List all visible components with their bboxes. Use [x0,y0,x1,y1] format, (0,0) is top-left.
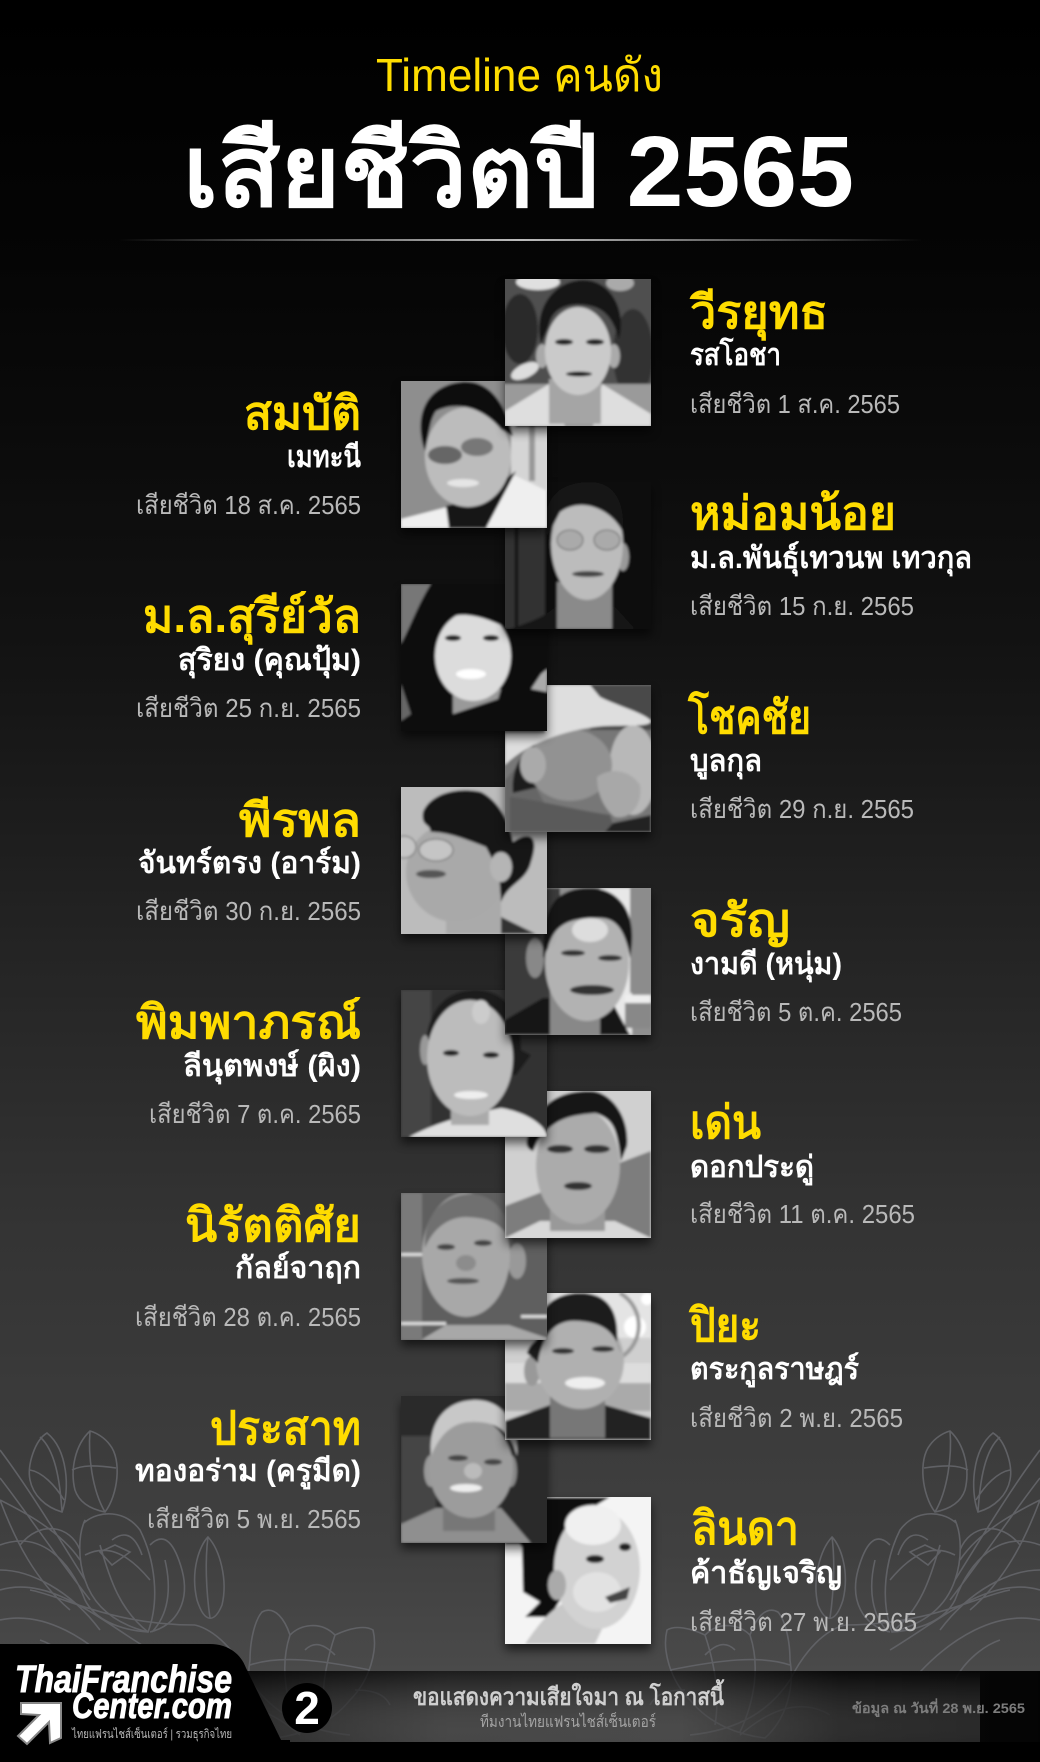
text: นิรัตติศัย กัลย์จาฤก: เสียชีวิต 28 ต.ค. 2565 [135,1302,361,1332]
photo: จรัญ [500,883,656,1041]
photo: นิรัตติศัย [396,1188,552,1346]
text: จรัญ งามดี [690,894,902,1027]
footer condolence message [413,1678,725,1731]
page number badge [282,1682,332,1734]
data date note: ข้อมูล ณ วันที่ 28 พ.ย. 2565 [852,1698,1025,1717]
text: ม.ล.สุรีย์วัล สุริยง [136,590,361,723]
text: จรัญ งามดี: งามดี (หนุ่ม) [690,948,842,983]
text: จรัญ งามดี: เสียชีวิต 5 ต.ค. 2565 [690,997,902,1027]
text: หม่อมน้อย: ม.ล.พันธุ์เทวนพ เทวกุล [690,541,972,577]
photo: เด่น [500,1086,656,1244]
photo: วีรยุทธ [500,274,656,432]
text: ปิยะ ตระกูลราษฎร์: เสียชีวิต 2 พ.ย. 2565 [690,1403,903,1433]
text: วีรยุทธ รสโอชา [689,286,900,419]
photo: โชคชัย [500,680,657,838]
text: โชคชัย บูลกุล: บูลกุล [690,745,762,780]
photo: ประสาท [396,1391,552,1549]
text: โชคชัย บูลกุล: เสียชีวิต 29 ก.ย. 2565 [690,794,914,824]
photo: พีรพล [392,782,552,940]
text: โชคชัย บูลกุล [687,690,914,824]
text: หม่อมน้อย: เสียชีวิต 15 ก.ย. 2565 [690,591,914,621]
logo [0,1644,290,1762]
logo: ไทยแฟรนไชส์เซ็นเตอร์ | รวมธุรกิจไทย [71,1726,232,1742]
text: จรัญ งามดี: จรัญ [690,894,790,947]
text: เด่น ดอกประดู่ [690,1096,915,1229]
photo: พิมพาภรณ์ [396,985,552,1143]
text: ปิยะ ตระกูลราษฎร์: ปิยะ [688,1299,761,1351]
floral lotus background left [0,1431,390,1738]
text: พิมพาภรณ์ ลีนุตพงษ์: เสียชีวิต 7 ต.ค. 2565 [149,1099,361,1129]
text: เด่น ดอกประดู่: เด่น [690,1096,762,1148]
text: นิรัตติศัย กัลย์จาฤก [135,1199,361,1332]
text: เด่น ดอกประดู่: เสียชีวิต 11 ต.ค. 2565 [690,1199,915,1229]
text: พิมพาภรณ์ ลีนุตพงษ์ [136,996,361,1129]
text: หม่อมน้อย [690,487,972,621]
text: พีรพล จันทร์ตรง: เสียชีวิต 30 ก.ย. 2565 [136,896,361,926]
logo: Center.com [72,1685,232,1726]
text: สมบัติ เมทะนี [136,387,361,520]
text: วีรยุทธ รสโอชา: วีรยุทธ [689,286,828,341]
text: ปิยะ ตระกูลราษฎร์ [688,1299,903,1433]
text: ประสาท ทองอร่าม: เสียชีวิต 5 พ.ย. 2565 [147,1504,361,1534]
floral lotus background right [650,1431,1040,1738]
text: พีรพล จันทร์ตรง: จันทร์ตรง (อาร์ม) [138,846,361,880]
text: ลินดา ค้าธัญเจริญ: เสียชีวิต 27 พ.ย. 2565 [690,1607,917,1637]
photo: ปิยะ [500,1288,656,1446]
footer band [0,1671,1040,1762]
text: พิมพาภรณ์ ลีนุตพงษ์: พิมพาภรณ์ [136,996,361,1048]
text: ประสาท ทองอร่าม: ประสาท [210,1402,361,1454]
text: ม.ล.สุรีย์วัล สุริยง: สุริยง (คุณปุ้ม) [178,644,361,679]
text: โชคชัย บูลกุล: โชคชัย [687,690,811,743]
title line 1: Timeline คนดัง [376,49,663,101]
text: ปิยะ ตระกูลราษฎร์: ตระกูลราษฎร์ [690,1352,859,1388]
title line 2: เสียชีวิตปี 2565 [183,116,854,228]
photo: สมบัติ [396,376,556,534]
text: ประสาท ทองอร่าม [135,1402,361,1534]
footer condolence message: ขอแสดงความเสียใจมา ณ โอกาสนี้ [413,1678,725,1711]
footer condolence message: ทีมงานไทยแฟรนไชส์เซ็นเตอร์ [480,1711,656,1731]
text: วีรยุทธ รสโอชา: รสโอชา [690,336,781,372]
photo: หม่อมน้อย [500,477,656,635]
text: ม.ล.สุรีย์วัล สุริยง: ม.ล.สุรีย์วัล [143,590,361,645]
text: พีรพล จันทร์ตรง: พีรพล [239,794,361,846]
text: สมบัติ เมทะนี: เมทะนี [287,441,361,474]
text: ม.ล.สุรีย์วัล สุริยง: เสียชีวิต 25 ก.ย. 2565 [136,693,361,723]
text: เด่น ดอกประดู่: ดอกประดู่ [690,1151,814,1186]
photo: ม.ล.สุรีย์วัล [396,579,552,737]
text: วีรยุทธ รสโอชา: เสียชีวิต 1 ส.ค. 2565 [690,389,900,419]
text: พีรพล จันทร์ตรง [136,794,361,926]
text: ลินดา ค้าธัญเจริญ: ลินดา [691,1502,799,1554]
text: สมบัติ เมทะนี: เสียชีวิต 18 ส.ค. 2565 [136,490,361,520]
text: ประสาท ทองอร่าม: ทองอร่าม (ครูมีด) [135,1455,361,1490]
logo: ThaiFranchise [15,1659,232,1701]
text: นิรัตติศัย กัลย์จาฤก: กัลย์จาฤก [235,1251,361,1285]
photo: ลินดา [500,1492,656,1650]
text: พิมพาภรณ์ ลีนุตพงษ์: ลีนุตพงษ์ (ผิง) [183,1049,361,1085]
text: ลินดา ค้าธัญเจริญ [690,1502,917,1637]
text: หม่อมน้อย: หม่อมน้อย [690,487,896,539]
text: ลินดา ค้าธัญเจริญ: ค้าธัญเจริญ [690,1557,842,1591]
text: นิรัตติศัย กัลย์จาฤก: นิรัตติศัย [185,1199,361,1251]
page number badge: 2 [294,1682,320,1734]
text: สมบัติ เมทะนี: สมบัติ [244,387,361,439]
